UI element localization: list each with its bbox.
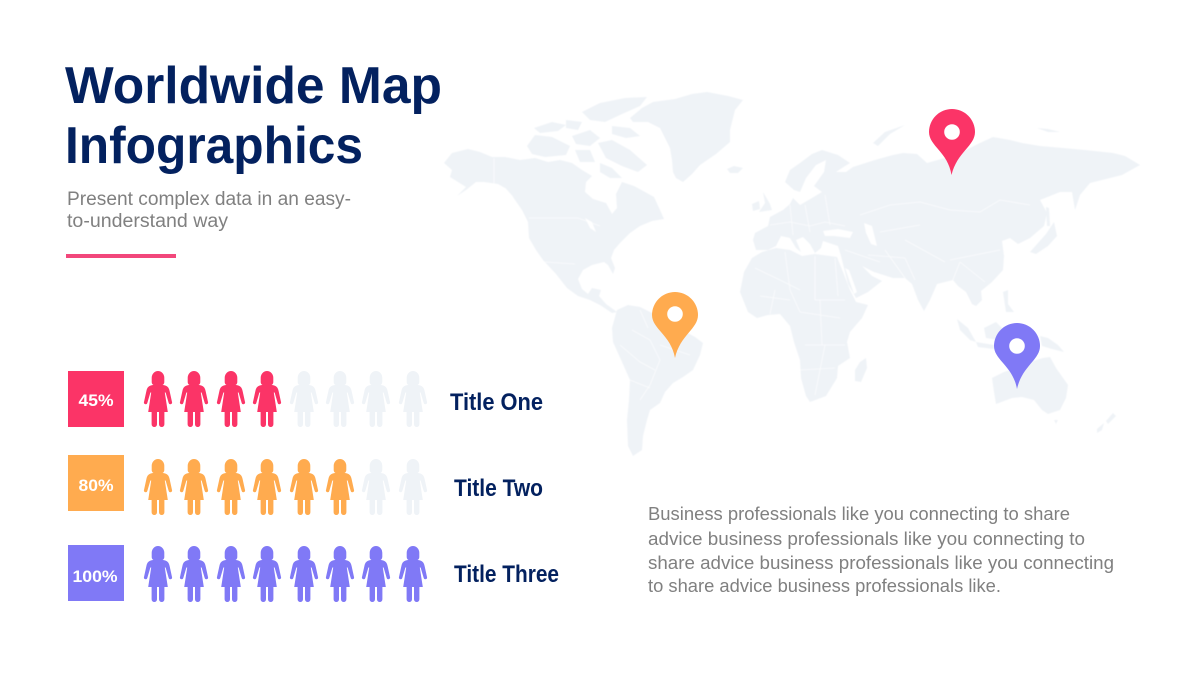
percentage badge 80%: 80% (78, 476, 114, 495)
pin: Australia (purple) (994, 323, 1040, 389)
pin: South America (orange) (652, 292, 698, 358)
Borneo (984, 322, 1004, 340)
Madagascar (855, 358, 867, 382)
Japan (1030, 222, 1057, 254)
description paragraph: to share advice business professionals like. (648, 575, 1001, 596)
percentage badge 100%: 100% (72, 567, 118, 586)
row one: 45% (68, 371, 543, 427)
Australia (992, 357, 1068, 414)
Eurasia (753, 137, 1140, 311)
people pictogram row two (144, 459, 427, 515)
Java (976, 342, 994, 349)
description paragraph (648, 503, 1114, 596)
accent bar (66, 254, 176, 258)
description paragraph: share advice business professionals like you connecting (648, 552, 1114, 573)
Arctic islands (527, 97, 647, 178)
Siberian islands (1037, 128, 1060, 132)
people pictogram row three (144, 546, 427, 602)
world map (444, 92, 1140, 456)
percentage badge 100% (68, 545, 124, 601)
percentage badge 80% (68, 455, 124, 511)
row two: 80% (68, 455, 543, 515)
Novaya Zemlya (873, 125, 905, 146)
Philippines (1003, 290, 1014, 312)
New Zealand (1097, 413, 1116, 433)
people pictogram row one (144, 371, 427, 427)
pin: Russia (red) (929, 109, 975, 175)
inland seas (585, 218, 1046, 294)
subtitle: to-understand way (67, 211, 229, 232)
title: Worldwide Map (65, 57, 442, 115)
description paragraph: Business professionals like you connecting to share (648, 503, 1070, 524)
British Isles (759, 192, 772, 212)
subtitle (67, 189, 351, 232)
Iceland (727, 166, 743, 173)
row three: 100% (68, 545, 559, 602)
Sakhalin (1046, 207, 1050, 226)
percentage badge 45%: 45% (78, 391, 114, 410)
country borders (494, 158, 1030, 400)
description paragraph: advice business professionals like you connecting to (648, 528, 1085, 549)
label: Title One: Title One (450, 389, 543, 416)
percentage badge 45% (68, 371, 124, 427)
Sumatra (957, 319, 976, 342)
New Guinea (1040, 336, 1064, 352)
label: Title Three: Title Three (454, 561, 559, 588)
North America (444, 149, 664, 313)
title (65, 57, 442, 175)
label: Title Two: Title Two (454, 475, 543, 502)
Africa (740, 248, 868, 402)
title: Infographics (65, 117, 363, 175)
South America (612, 305, 703, 456)
subtitle: Present complex data in an easy- (67, 189, 351, 210)
Greenland (630, 92, 743, 182)
